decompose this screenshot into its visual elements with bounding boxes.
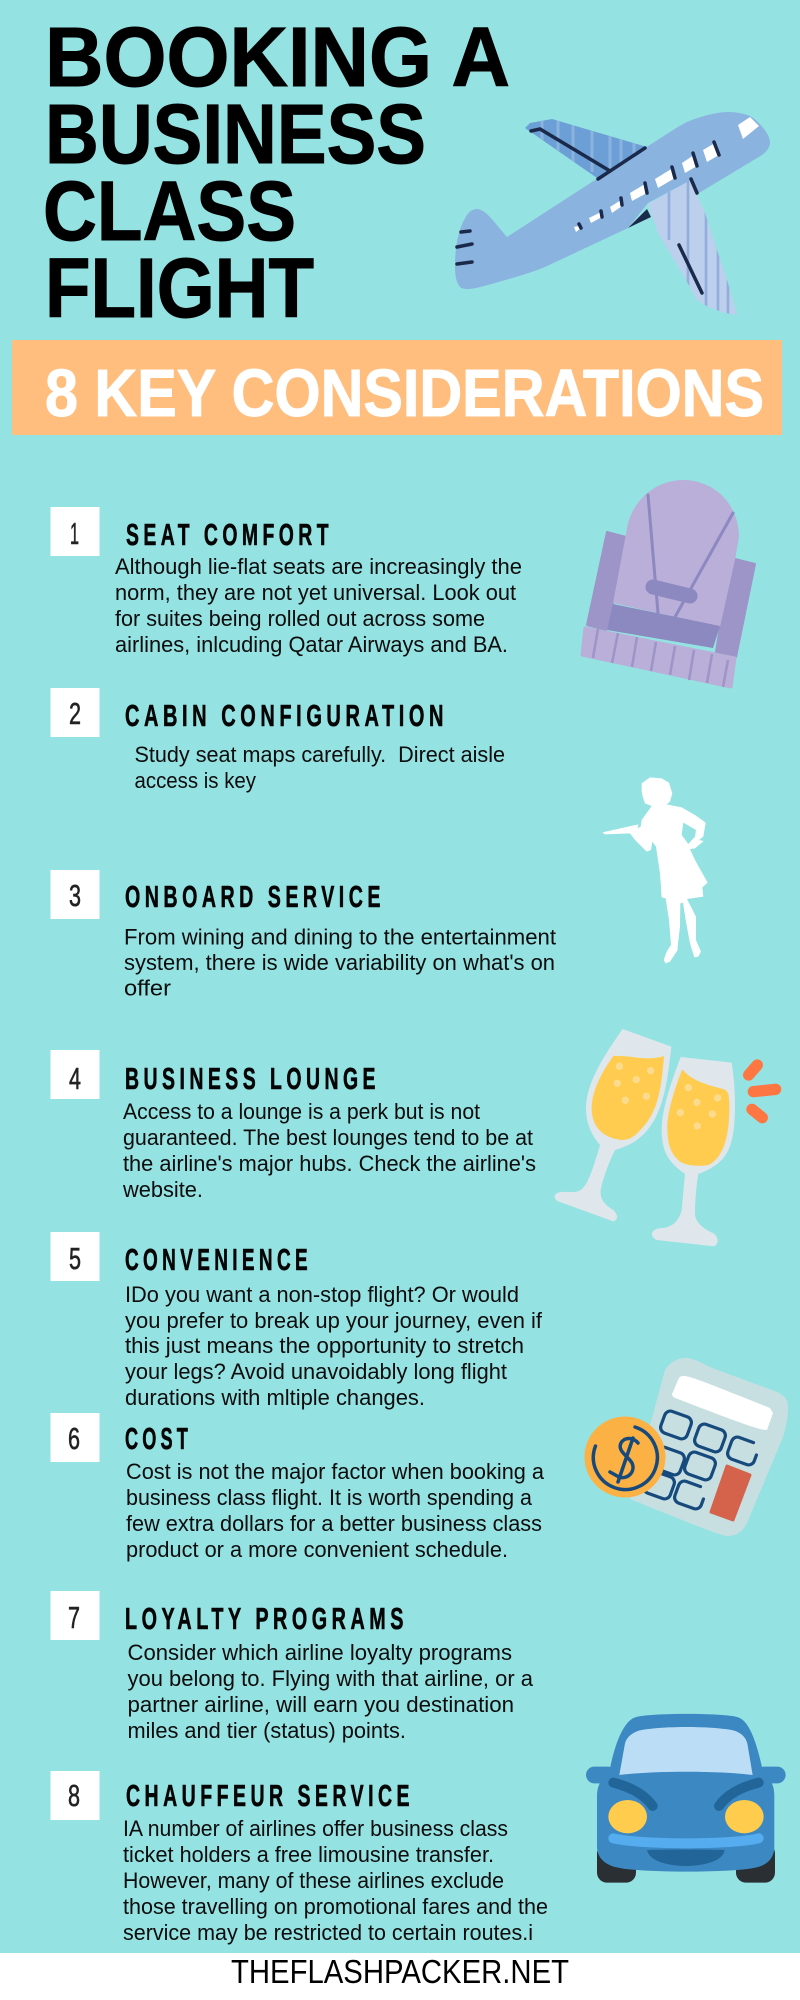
icon: flight attendant silhouette	[602, 777, 708, 963]
text: seat comfort: Although lie-flat seats are increasingly the	[115, 554, 522, 579]
heading: onboard service: ONBOARD SERVICE	[125, 880, 385, 914]
heading: chauffeur service: CHAUFFEUR SERVICE	[126, 1779, 414, 1813]
text: cabin configuration: Study seat maps carefully. Direct aisle	[134, 742, 505, 767]
text: loyalty programs: Consider which airline loyalty programs	[128, 1640, 512, 1665]
text: convenience: durations with mltiple changes.	[125, 1385, 425, 1410]
number box 8: 8	[68, 1779, 80, 1813]
item 2: cabin configuration	[50, 688, 505, 793]
number box 6: 6	[68, 1422, 80, 1456]
text: convenience: this just means the opportunity to stretch	[125, 1333, 524, 1358]
text: cost: business class flight. It is worth spending a	[126, 1485, 533, 1510]
text: seat comfort: norm, they are not yet universal. Look out	[115, 580, 516, 605]
number box 3: 3	[69, 879, 81, 913]
footer: website: THEFLASHPACKER.NET	[231, 1953, 569, 1990]
item 8: chauffeur service	[50, 1771, 548, 1945]
icon: blue car	[586, 1714, 786, 1883]
text: seat comfort	[115, 554, 522, 657]
text: chauffeur service	[123, 1816, 548, 1945]
text: business lounge	[122, 1099, 536, 1202]
number box 5: 5	[69, 1242, 81, 1276]
title: BOOKING A	[45, 10, 510, 104]
heading: loyalty programs: LOYALTY PROGRAMS	[125, 1602, 408, 1636]
number box 1	[50, 507, 100, 556]
text: onboard service	[124, 924, 556, 1000]
text: loyalty programs	[128, 1640, 534, 1743]
text: business lounge: guaranteed. The best lounges tend to be at	[123, 1125, 533, 1150]
number box 3	[50, 870, 100, 919]
text: cost: Cost is not the major factor when booking a	[126, 1459, 545, 1484]
number box 5	[50, 1232, 100, 1281]
text: seat comfort: airlines, inlcuding Qatar Airways and BA.	[115, 632, 508, 657]
number box 2	[50, 688, 100, 737]
text: business lounge: Access to a lounge is a perk but is not	[123, 1099, 480, 1124]
number box 6	[50, 1413, 100, 1462]
text: cost: few extra dollars for a better business class	[126, 1511, 542, 1536]
text: convenience: your legs? Avoid unavoidably long flight	[125, 1359, 507, 1384]
footer: website	[0, 1953, 800, 2000]
item 1: seat comfort	[50, 507, 522, 657]
number box 7: 7	[68, 1601, 80, 1635]
text: cost: product or a more convenient schedule.	[126, 1537, 508, 1562]
number box 4	[50, 1050, 100, 1099]
number box 1: 1	[70, 517, 79, 551]
item 6: cost	[50, 1413, 545, 1562]
item 4: business lounge	[50, 1050, 536, 1202]
item 3: onboard service	[50, 870, 556, 1000]
text: loyalty programs: miles and tier (status) points.	[128, 1718, 406, 1743]
icon: calculator and dollar coin	[584, 1358, 788, 1536]
title: FLIGHT	[45, 241, 314, 335]
heading: business lounge: BUSINESS LOUNGE	[125, 1062, 380, 1096]
number box 8	[50, 1771, 100, 1820]
title: BUSINESS	[45, 87, 426, 181]
text: convenience	[125, 1282, 543, 1410]
text: cabin configuration: access is key	[134, 768, 256, 793]
item 5: convenience	[50, 1232, 543, 1410]
heading: cost: COST	[125, 1422, 192, 1456]
text: loyalty programs: partner airline, will earn you destination	[128, 1692, 514, 1717]
text: chauffeur service: ticket holders a free limousine transfer.	[123, 1842, 494, 1867]
text: chauffeur service: However, many of these airlines exclude	[123, 1868, 504, 1893]
icon: champagne glasses	[555, 1029, 776, 1246]
text: cabin configuration	[134, 742, 505, 793]
heading: cabin configuration: CABIN CONFIGURATION	[125, 699, 448, 733]
text: convenience: you prefer to break up your journey, even if	[125, 1308, 543, 1333]
text: convenience: IDo you want a non-stop flight? Or would	[125, 1282, 519, 1307]
number box 7	[50, 1591, 100, 1640]
text: loyalty programs: you belong to. Flying with that airline, or a	[128, 1666, 534, 1691]
title: CLASS	[43, 164, 296, 258]
text: business lounge: the airline's major hubs. Check the airline's	[123, 1151, 536, 1176]
text: chauffeur service: those travelling on promotional fares and the	[123, 1894, 548, 1919]
heading: seat comfort: SEAT COMFORT	[126, 518, 333, 552]
item 7: loyalty programs	[50, 1591, 534, 1743]
title	[43, 10, 510, 335]
text: onboard service: offer	[124, 976, 171, 1000]
text: onboard service: system, there is wide variability on what's on	[124, 950, 555, 975]
icon: airplane	[455, 112, 770, 318]
text: chauffeur service: IA number of airlines offer business class	[123, 1816, 508, 1841]
text: seat comfort: for suites being rolled out across some	[115, 606, 485, 631]
number box 2: 2	[69, 697, 81, 731]
text: onboard service: From wining and dining to the entertainment	[124, 924, 556, 950]
text: cost	[126, 1459, 545, 1562]
number box 4: 4	[69, 1062, 81, 1096]
text: business lounge: website.	[122, 1177, 203, 1202]
heading: convenience: CONVENIENCE	[125, 1243, 312, 1277]
text: chauffeur service: service may be restricted to certain routes.i	[123, 1920, 533, 1945]
icon: airline seat	[582, 480, 755, 687]
